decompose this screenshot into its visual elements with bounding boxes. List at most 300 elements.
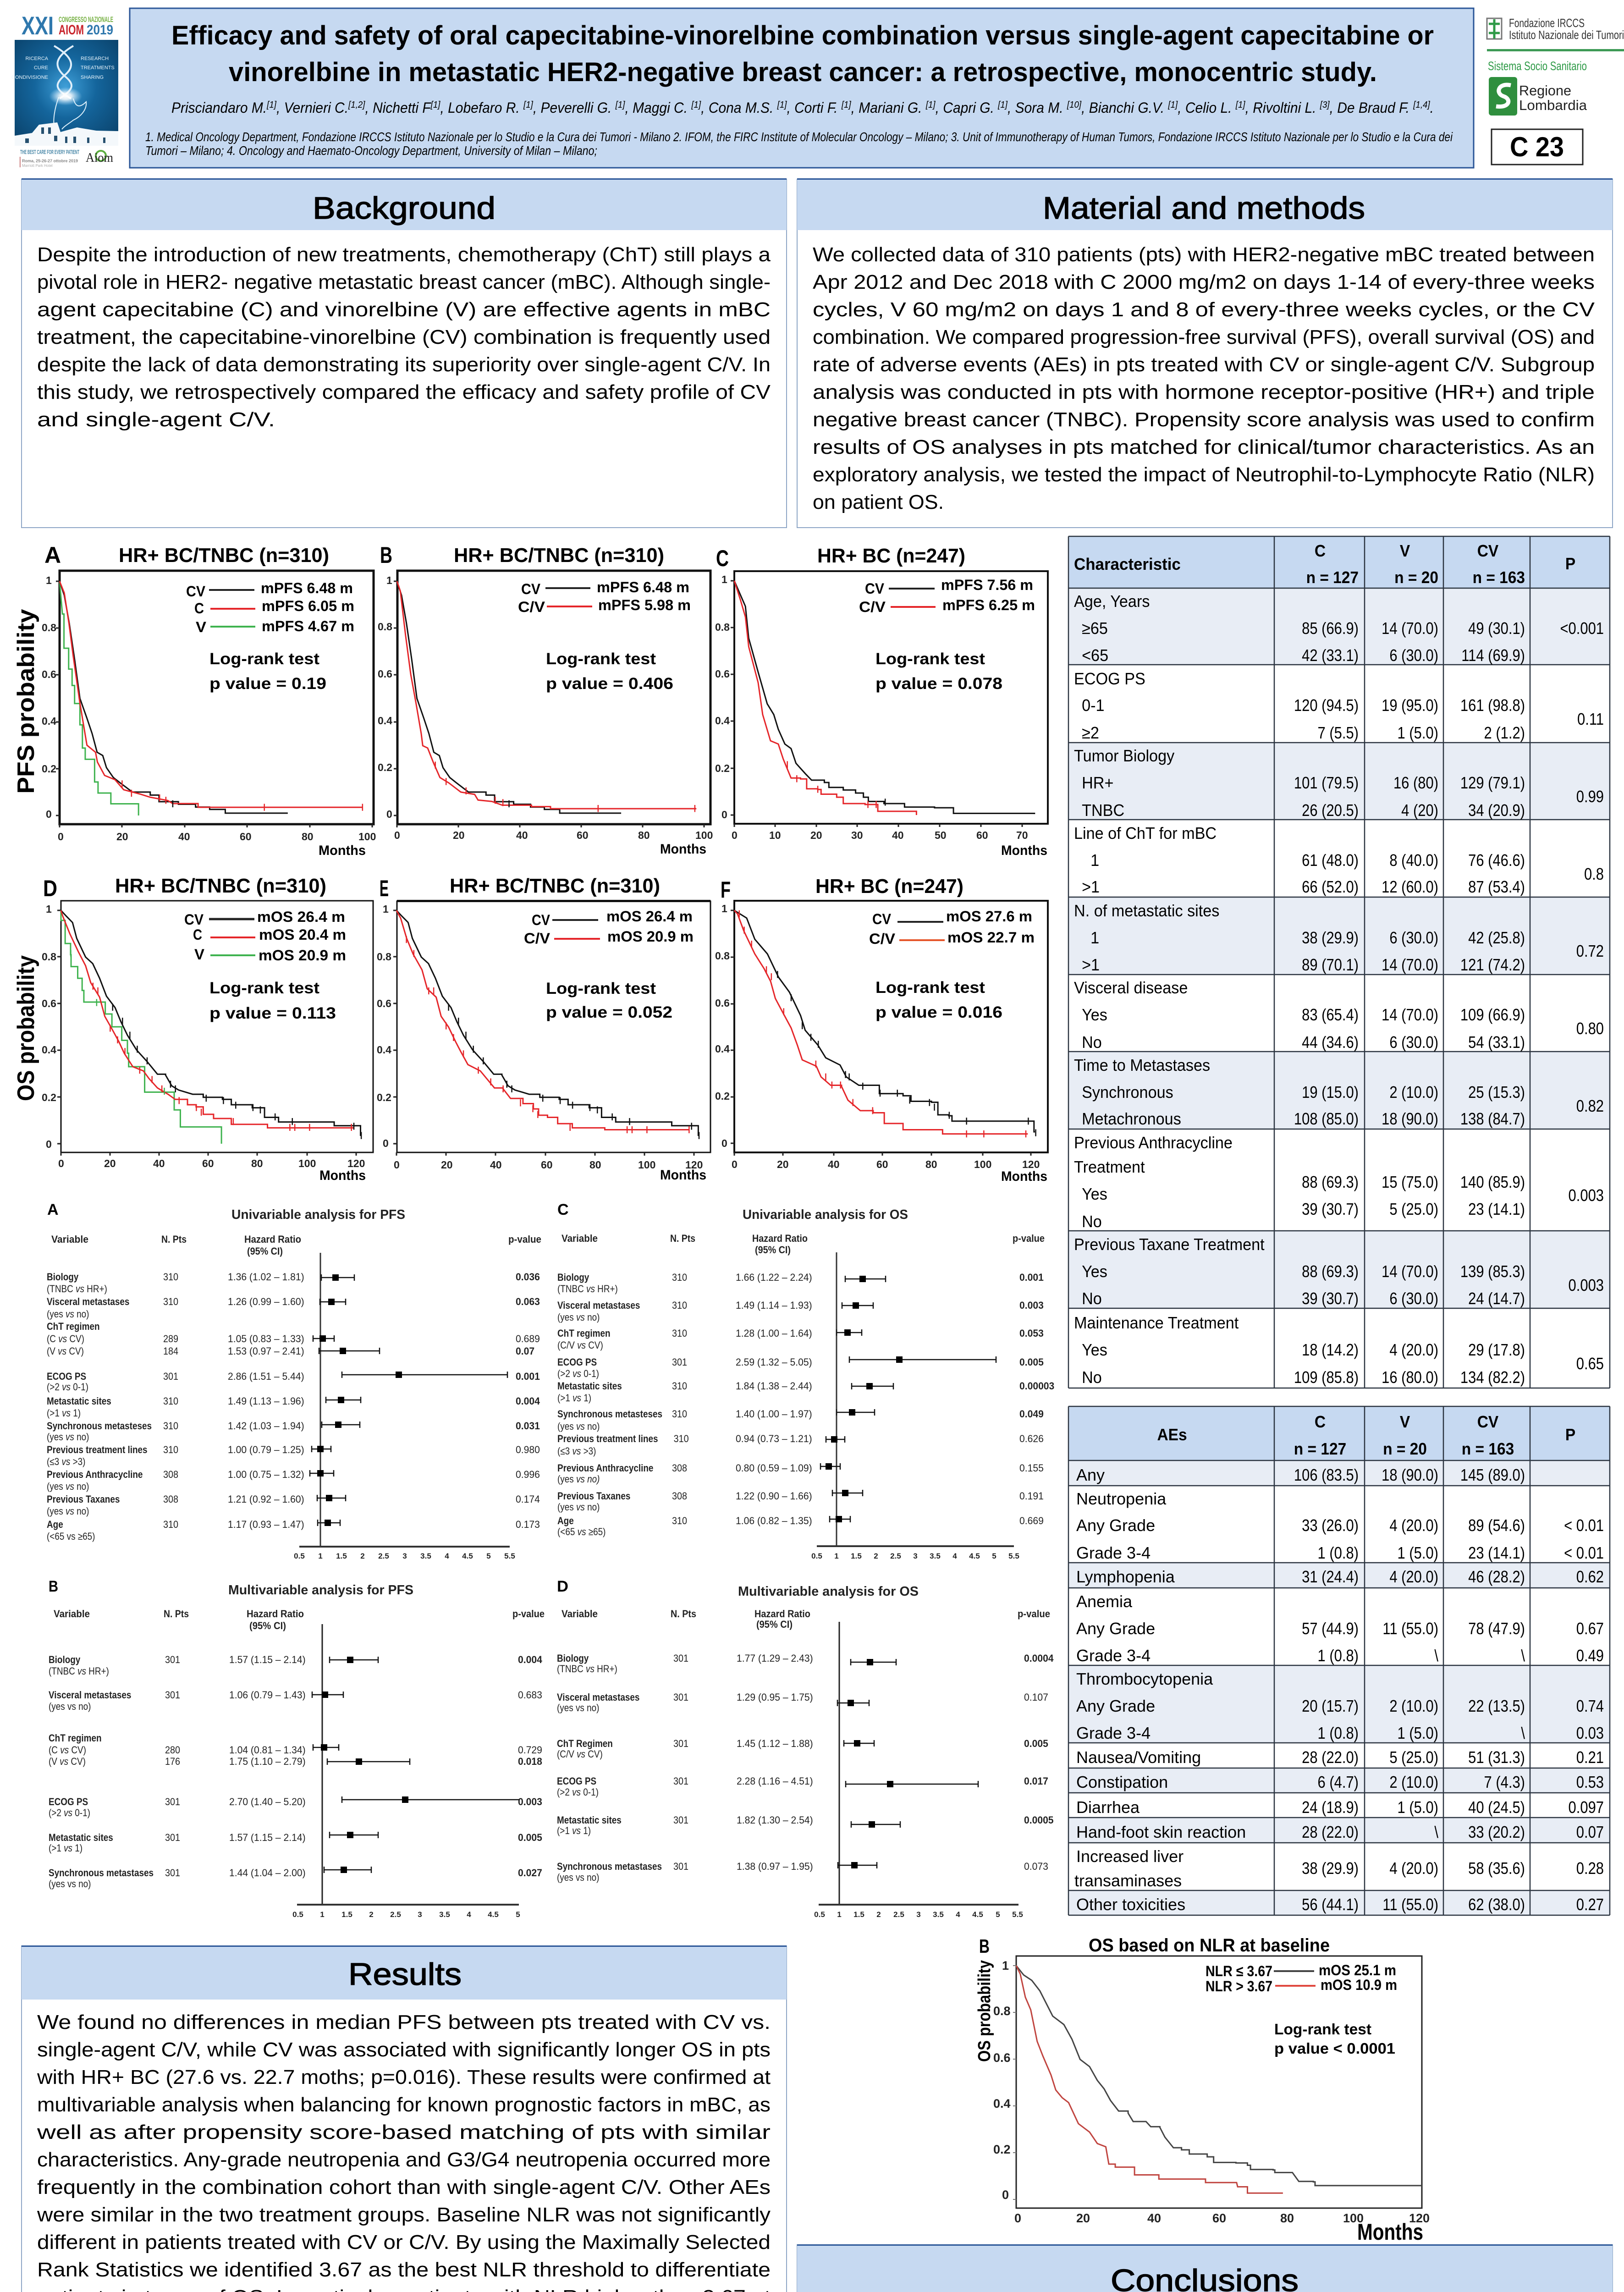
chart A: PFS HR+ BC/TNBC, CV vs C vs V: Months [319,843,366,858]
chart F: OS HR+ BC, CV vs C/V: 0.4 [715,1043,730,1055]
column CV values: 161 (98.8) [1460,697,1525,715]
authors: , Capri G. [936,99,998,116]
forest plot C: univariable analysis for OS: 1.49 (1.14 – 1.93) [736,1300,812,1311]
forest plot C: univariable analysis for OS: Visceral metastases [557,1300,640,1311]
forest plot A: univariable analysis for PFS: Univariable analysis for PFS [231,1207,405,1222]
panel: material and methods [797,178,1613,528]
adverse event labels: Hand-foot skin reaction [1076,1823,1246,1841]
forest plot D: multivariable analysis for OS: 5.5 [1012,1910,1023,1919]
forest plot A: univariable analysis for PFS: 3.5 [420,1552,431,1560]
legend C: mPFS 7.56 m [941,577,1033,593]
table header row: P [1565,1426,1575,1444]
chart: OS based on NLR at baseline: Months [1357,2219,1423,2245]
column C values: 39 (30.7) [1302,1290,1359,1308]
chart C: PFS HR+ BC, CV vs C/V [715,545,1048,858]
column CV values: 121 (74.2) [1460,956,1525,975]
chart A: PFS HR+ BC/TNBC, CV vs C vs V: A [44,542,61,568]
forest plot C: univariable analysis for OS: 2.59 (1.32 – 5.05) [736,1356,812,1368]
forest plot A: univariable analysis for PFS: 1.36 (1.02 – 1.81) [228,1271,304,1283]
forest plot C: univariable analysis for OS: Previous Anthracycline [557,1463,653,1474]
column P values [1560,620,1604,1373]
chart F: OS HR+ BC, CV vs C/V: 20 [777,1158,789,1170]
legend A: C [194,600,204,617]
column CV values: 89 (54.6) [1468,1517,1525,1535]
chart F: OS HR+ BC, CV vs C/V: 0 [732,1158,738,1170]
column C values: 39 (30.7) [1302,1201,1359,1219]
forest plot C: univariable analysis for OS: (C/V vs CV) [557,1340,603,1351]
forest plot A: univariable analysis for PFS: 1.21 (0.92 – 1.60) [228,1493,304,1505]
forest plot A: univariable analysis for PFS: 0.07 [516,1345,534,1357]
forest plot B: multivariable analysis for PFS: Metastatic sites [49,1832,113,1843]
text block: background: agent capecitabine (C) and vinorelbine (V) are effective agents in mBC [37,298,771,321]
forest plot C: univariable analysis for OS: (yes vs no) [557,1474,600,1485]
forest plot A: univariable analysis for PFS: 0.174 [516,1493,540,1505]
forest plot D: multivariable analysis for OS: (>2 vs 0-1) [557,1787,599,1798]
text block: results: were similar in the two treatment groups. Baseline NLR was not significantly [37,2204,771,2226]
column CV values: 7 (4.3) [1484,1774,1525,1792]
log-rank F [875,979,1002,1021]
column P values: 0.49 [1576,1647,1604,1665]
column C values: 7 (5.5) [1318,724,1359,743]
characteristic labels: Maintenance Treatment [1074,1314,1239,1332]
forest plot D: multivariable analysis for OS: (TNBC vs HR+) [557,1664,617,1675]
chart D: OS HR+ BC/TNBC, CV vs C vs V: 1 [46,903,52,915]
column P values: 0.72 [1576,942,1604,961]
chart: OS based on NLR at baseline: 0.8 [993,2004,1011,2018]
logo: Regione Lombardia [1489,77,1587,116]
column C values: 89 (70.1) [1302,956,1359,975]
characteristic labels [1074,592,1265,1387]
heading: material and methods [797,178,1613,230]
forest plot D: multivariable analysis for OS: (yes vs no) [557,1702,599,1713]
chart D: OS HR+ BC/TNBC, CV vs C vs V: 40 [153,1157,165,1169]
logo: Regione Lombardia: Regione [1519,83,1571,99]
log-rank C: p value = 0.078 [875,675,1002,693]
chart F: OS HR+ BC, CV vs C/V: 0.8 [715,950,730,962]
table header row: n = 127 [1294,1440,1346,1458]
forest plot D: multivariable analysis for OS: 0.073 [1024,1861,1048,1872]
legend D: C [193,926,202,943]
column V values: 4 (20.0) [1389,1341,1438,1360]
text block: background: and single-agent C/V. [37,408,275,431]
forest plot D: multivariable analysis for OS: 1.29 (0.95 – 1.75) [737,1691,813,1703]
forest plot C: univariable analysis for OS: 0.049 [1019,1408,1044,1420]
column P values: 0.74 [1576,1697,1604,1716]
text block: results: characteristics. Any-grade neutropenia and G3/G4 neutropenia occurred more [37,2149,771,2171]
chart: OS based on NLR at baseline: 1 [1002,1959,1009,1972]
forest plot C: univariable analysis for OS: 310 [672,1515,687,1526]
legend E: C/V [524,930,551,947]
text block: background: Despite the introduction of new treatments, chemotherapy (ChT) still plays a [37,243,771,266]
forest plot B: multivariable analysis for PFS: p-value [512,1608,545,1620]
log-rank NLR [1274,2021,1395,2057]
chart: OS based on NLR at baseline: 0 [1002,2188,1009,2202]
forest plot A: univariable analysis for PFS: 4 [445,1552,449,1560]
chart B: PFS HR+ BC/TNBC, CV vs C/V: 0 [386,808,392,820]
column V values: 14 (70.0) [1382,1263,1438,1281]
log-rank B: p value = 0.406 [546,675,673,693]
forest plot D: multivariable analysis for OS: 301 [673,1653,688,1664]
adverse event labels: transaminases [1074,1871,1182,1890]
characteristic labels: Line of ChT for mBC [1074,824,1217,843]
forest plot A: univariable analysis for PFS: (TNBC vs HR+) [47,1284,107,1295]
authors: , Nichetti F [365,99,432,116]
forest plot A: univariable analysis for PFS: 1.26 (0.99 – 1.60) [228,1296,304,1307]
chart C: PFS HR+ BC, CV vs C/V: 0.6 [715,668,730,680]
forest plot D: multivariable analysis for OS: 0.017 [1024,1775,1048,1787]
panel: results [22,1945,787,2292]
legend NLR: mOS 10.9 m [1321,1977,1397,1993]
forest plot D: multivariable analysis for OS: 0.5 [814,1910,825,1919]
forest plot A: univariable analysis for PFS: (C vs CV) [47,1333,84,1344]
poster artwork: CURE [34,65,48,71]
heading: material and methods: Material and methods [1043,191,1365,226]
adverse event labels [1074,1466,1246,1914]
legend C: C/V [859,599,886,615]
chart B: PFS HR+ BC/TNBC, CV vs C/V: 0.4 [378,715,392,727]
forest plot A: univariable analysis for PFS: 0.996 [516,1469,540,1480]
characteristic labels: >1 [1082,956,1100,974]
legend A: mPFS 6.48 m [261,580,353,596]
characteristic labels: 0-1 [1082,696,1105,715]
characteristic labels: Yes [1082,1185,1107,1203]
chart D: OS HR+ BC/TNBC, CV vs C vs V [42,875,373,1183]
forest plot A: univariable analysis for PFS: 0.5 [294,1552,305,1560]
forest plot B: multivariable analysis for PFS: 1.75 (1.10 – 2.79) [229,1756,306,1767]
legend D: mOS 20.4 m [259,926,346,943]
authors: , Corti F. [787,99,842,116]
column CV values: 40 (24.5) [1468,1799,1525,1817]
heading: results: Results [348,1957,462,1992]
column P values: 0.097 [1569,1799,1604,1817]
column V values: 2 (10.0) [1389,1084,1438,1102]
column P values: 0.82 [1576,1097,1604,1116]
table header row: n = 20 [1394,569,1438,587]
chart C: PFS HR+ BC, CV vs C/V: C [716,545,729,571]
column V values: 14 (70.0) [1382,956,1438,975]
chart: OS based on NLR at baseline: OS probability [975,1960,994,2062]
forest plot B: multivariable analysis for PFS: 4 [467,1910,471,1919]
table header row: V [1400,542,1410,560]
forest plot C: univariable analysis for OS: 3.5 [930,1552,941,1560]
forest plot B: multivariable analysis for PFS: 3.5 [439,1910,450,1919]
forest plot D: multivariable analysis for OS: (yes vs no) [557,1872,599,1883]
forest plot C: univariable analysis for OS: 0.626 [1019,1433,1044,1444]
authors: [1] [997,100,1007,110]
chart A: PFS HR+ BC/TNBC, CV vs C vs V: 0.6 [42,668,56,680]
forest plot C: univariable analysis for OS: 0.155 [1019,1462,1044,1474]
column C values: 85 (66.9) [1302,620,1359,638]
affiliations: Tumori – Milano; 4. Oncology and Haemato-Oncology Department, University of Milan – Milano; [145,143,597,158]
chart B: PFS HR+ BC/TNBC, CV vs C/V: B [380,542,392,568]
chart E: OS HR+ BC/TNBC, CV vs C/V [377,875,710,1183]
column CV values: 54 (33.1) [1468,1034,1525,1052]
column V values: 2 (10.0) [1389,1697,1438,1716]
forest plot B: multivariable analysis for PFS: Hazard Ratio [247,1608,304,1620]
column C values: 109 (85.8) [1294,1369,1359,1387]
forest plot A: univariable analysis for PFS: 1.49 (1.13 – 1.96) [228,1395,304,1407]
table header row: n = 163 [1473,569,1525,587]
forest plot C: univariable analysis for OS: Hazard Ratio [752,1233,808,1244]
legend D: V [194,946,205,963]
forest plot C: univariable analysis for OS: 1 [834,1552,839,1560]
chart E: OS HR+ BC/TNBC, CV vs C/V: 20 [441,1159,453,1171]
forest plot B: multivariable analysis for PFS: 301 [165,1796,180,1807]
column C values: 38 (29.9) [1302,929,1359,948]
forest plot C: univariable analysis for OS: 0.005 [1019,1356,1044,1368]
column V values: 15 (75.0) [1382,1174,1438,1192]
column C values: 56 (44.1) [1302,1896,1359,1914]
text block: background: pivotal role in HER2- negative metastatic breast cancer (mBC). Although single- [37,271,771,293]
column C values: 120 (94.5) [1294,697,1359,715]
forest plot D: multivariable analysis for OS: 301 [673,1861,688,1872]
chart F: OS HR+ BC, CV vs C/V: 80 [925,1158,937,1170]
chart C: PFS HR+ BC, CV vs C/V: 20 [810,829,822,841]
table header row: Characteristic [1074,555,1181,573]
forest plot A: univariable analysis for PFS: 1.00 (0.75 – 1.32) [228,1469,304,1480]
forest plot B: multivariable analysis for PFS: N. Pts [164,1608,189,1620]
column C values: 1 (0.8) [1318,1725,1359,1743]
column C values: 19 (15.0) [1302,1084,1359,1102]
forest plot C: univariable analysis for OS: 0.053 [1019,1328,1044,1339]
column CV values: 29 (17.8) [1468,1341,1525,1360]
column V values: 1 (5.0) [1398,1725,1438,1743]
chart: OS based on NLR at baseline [975,1935,1430,2245]
authors: [10] [1067,100,1082,110]
column CV values: 23 (14.1) [1468,1544,1525,1563]
forest plot D: multivariable analysis for OS: Variable [562,1608,598,1620]
poster footer: THE BEST CARE FOR EVERY PATIENT [20,149,79,155]
legend B: CV [521,581,541,597]
characteristic labels: Yes [1082,1341,1107,1359]
log-rank E [546,980,672,1021]
authors: [1] [925,100,936,110]
column V values: 16 (80.0) [1382,1369,1438,1387]
authors: [1] [691,100,701,110]
table header row: n = 127 [1306,569,1359,587]
column CV values: 114 (69.9) [1461,647,1525,665]
forest plot A: univariable analysis for PFS: 0.004 [516,1395,540,1407]
forest plot A: univariable analysis for PFS: p-value [508,1234,541,1245]
forest plot D: multivariable analysis for OS: 1.45 (1.12 – 1.88) [737,1738,813,1749]
legend B: mPFS 6.48 m [597,579,689,595]
column V values: 1 (5.0) [1398,1544,1438,1563]
forest plot C: univariable analysis for OS: 0.00003 [1019,1380,1054,1392]
column C values: 26 (20.5) [1302,802,1359,820]
chart B: PFS HR+ BC/TNBC, CV vs C/V: 100 [695,829,713,841]
forest plot B: multivariable analysis for PFS: ECOG PS [49,1796,88,1807]
chart F: OS HR+ BC, CV vs C/V: 0 [721,1137,727,1149]
forest plot A: univariable analysis for PFS: 0.173 [516,1519,540,1530]
column CV values: 33 (20.2) [1468,1824,1525,1842]
forest plot C: univariable analysis for OS: ECOG PS [557,1357,597,1368]
chart C: PFS HR+ BC, CV vs C/V: 0.2 [715,762,730,774]
log-rank B: Log-rank test [546,650,656,668]
adverse event labels: Nausea/Vomiting [1076,1748,1201,1767]
column V values: 1 (5.0) [1398,1799,1438,1817]
table header row: CV [1477,1413,1498,1431]
forest plot B: multivariable analysis for PFS: Multivariable analysis for PFS [228,1583,413,1598]
characteristic labels: Time to Metastases [1074,1056,1210,1074]
column CV values: 76 (46.6) [1468,852,1525,870]
chart D: OS HR+ BC/TNBC, CV vs C vs V: 100 [298,1157,316,1169]
poster code box: C 23: C 23 [1510,132,1564,162]
text block: background: this study, we retrospectively compared the efficacy and safety profile of CV [37,381,771,403]
column CV values: \ [1521,1725,1525,1743]
forest plot C: univariable analysis for OS: 1.40 (1.00 – 1.97) [736,1408,812,1420]
legend A: V [196,619,207,635]
forest plot C: univariable analysis for OS: 308 [672,1463,687,1474]
authors: [1,2] [348,100,365,110]
forest plot D: multivariable analysis for OS: 0.107 [1024,1691,1048,1703]
column C values: 88 (69.3) [1302,1174,1359,1192]
adverse event labels: Grade 3-4 [1076,1724,1151,1742]
column CV values: 129 (79.1) [1460,774,1525,793]
chart E: OS HR+ BC/TNBC, CV vs C/V: 40 [490,1159,502,1171]
characteristic labels: ≥2 [1082,724,1099,742]
chart D: OS HR+ BC/TNBC, CV vs C vs V: 120 [347,1157,365,1169]
column CV values: 24 (14.7) [1468,1290,1525,1308]
chart: OS based on NLR at baseline: 20 [1076,2211,1090,2225]
forest plot D: multivariable analysis for OS: 0.0004 [1024,1653,1054,1664]
log-rank NLR: Log-rank test [1274,2021,1371,2038]
forest plot D: multivariable analysis for OS: 301 [673,1692,688,1703]
forest plot C: univariable analysis for OS: 310 [672,1381,687,1392]
forest plot D: multivariable analysis for OS: (95% CI) [756,1619,793,1630]
column CV values: 51 (31.3) [1468,1749,1525,1767]
forest plot D: multivariable analysis for OS: 3 [916,1910,921,1919]
characteristic labels: Tumor Biology [1074,747,1175,765]
forest plot D: multivariable analysis for OS: Synchronous metastases [557,1861,662,1872]
forest plot A: univariable analysis for PFS: (V vs CV) [47,1346,84,1357]
text block: results: frequently in the combination cohort than with single-agent C/V. Other AEs [37,2176,771,2198]
forest plot C: univariable analysis for OS: p-value [1013,1233,1045,1244]
column C values: 6 (4.7) [1318,1774,1359,1792]
forest plot B: multivariable analysis for PFS: 5 [516,1910,520,1919]
chart C: PFS HR+ BC, CV vs C/V: 60 [976,829,988,841]
log-rank D [209,979,336,1022]
forest plot D: multivariable analysis for OS: (>1 vs 1) [557,1825,591,1836]
text block: results: Rank Statistics we identified 3.67 as the best NLR threshold to differentiate [37,2259,771,2281]
forest plot C: univariable analysis for OS: 308 [672,1491,687,1502]
chart D: OS HR+ BC/TNBC, CV vs C vs V: 0.4 [42,1044,56,1056]
column C values: 57 (44.9) [1302,1620,1359,1638]
characteristic labels: Yes [1082,1262,1107,1281]
forest plot A: univariable analysis for PFS: 0.063 [516,1296,540,1307]
authors: [1] [523,100,533,110]
logo: Fondazione IRCCS: Fondazione IRCCS [1509,16,1585,30]
chart: OS based on NLR at baseline: 100 [1343,2211,1364,2225]
column V values: 6 (30.0) [1389,647,1438,665]
authors: , Rivoltini L. [1245,99,1320,116]
forest plot C: univariable analysis for OS: 0.001 [1019,1272,1044,1283]
table header row: C [1315,1413,1326,1431]
forest plot A: univariable analysis for PFS: 1.00 (0.79 – 1.25) [228,1444,304,1455]
column C values: 42 (33.1) [1302,647,1359,665]
legend E: CV [532,912,551,928]
log-rank D: p value = 0.113 [209,1004,336,1022]
column V values: 5 (25.0) [1389,1201,1438,1219]
forest plot A: univariable analysis for PFS: 5 [486,1552,491,1560]
chart A: PFS HR+ BC/TNBC, CV vs C vs V: 0.8 [42,622,56,634]
forest plot B: multivariable analysis for PFS: Variable [54,1608,90,1620]
table header row [1074,542,1575,587]
forest plot B: multivariable analysis for PFS: 3 [418,1910,422,1919]
poster code box: C 23 [1492,129,1583,165]
adverse event labels: Increased liver [1076,1847,1184,1866]
forest plot D: multivariable analysis for OS: (C/V vs CV) [557,1749,603,1760]
forest plot B: multivariable analysis for PFS: 2.70 (1.40 – 5.20) [229,1796,306,1807]
forest plot A: univariable analysis for PFS: Biology [47,1272,79,1283]
authors: , Maggi C. [625,99,691,116]
title: vinorelbine in metastatic HER2-negative breast cancer: a retrospective, monocentric study. [229,57,1377,87]
column CV values: 42 (25.8) [1468,929,1525,948]
column P values: 0.21 [1576,1749,1604,1767]
forest plot A: univariable analysis for PFS: Previous Taxanes [47,1494,120,1505]
forest plot A: univariable analysis for PFS: (≤3 vs >3) [47,1456,85,1467]
chart F: OS HR+ BC, CV vs C/V: 100 [974,1158,991,1170]
forest plot A: univariable analysis for PFS: (yes vs no) [47,1481,89,1492]
forest plot D: multivariable analysis for OS: 2.5 [893,1910,904,1919]
adverse event labels: Neutropenia [1076,1489,1167,1508]
table header row: CV [1477,542,1498,560]
forest plot C: univariable analysis for OS: (yes vs no) [557,1502,600,1513]
forest plot B: multivariable analysis for PFS: (yes vs no) [49,1879,91,1890]
forest plot B: multivariable analysis for PFS: 301 [165,1654,180,1665]
forest plot D: multivariable analysis for OS: 1.5 [853,1910,864,1919]
characteristic labels: No [1082,1212,1102,1231]
heading: background [22,178,787,230]
column CV values: 22 (13.5) [1468,1697,1525,1716]
column C values: 44 (34.6) [1302,1034,1359,1052]
chart C: PFS HR+ BC, CV vs C/V: Months [1001,843,1047,858]
text block: methods: Apr 2012 and Dec 2018 with C 2000 mg/m2 on days 1-14 of every-three weeks [813,271,1595,293]
poster artwork: RESEARCH [81,56,109,61]
panel: conclusions [797,2244,1613,2292]
chart C: PFS HR+ BC, CV vs C/V: 30 [851,829,863,841]
table header row: n = 20 [1383,1440,1427,1458]
column C values: 33 (26.0) [1302,1517,1359,1535]
authors: [1] [777,100,787,110]
adverse event labels: Other toxicities [1076,1895,1185,1914]
chart B: PFS HR+ BC/TNBC, CV vs C/V [378,542,713,857]
chart C: PFS HR+ BC, CV vs C/V: 0 [732,829,738,841]
forest plot B: multivariable analysis for PFS: 1.44 (1.04 – 2.00) [229,1867,306,1879]
column C values: 24 (18.9) [1302,1799,1359,1817]
adverse event labels: Any [1076,1466,1105,1484]
column C values: 31 (24.4) [1302,1568,1359,1587]
log-rank C [875,650,1002,693]
table header row: AEs [1157,1426,1187,1444]
forest plot C: univariable analysis for OS: Synchronous metasteses [557,1409,662,1420]
forest plot A: univariable analysis for PFS: N. Pts [161,1234,187,1245]
column C values: 88 (69.3) [1302,1263,1359,1281]
forest plot C: univariable analysis for OS: C [557,1201,569,1218]
forest plot D: multivariable analysis for OS: 3.5 [933,1910,944,1919]
column CV values: 138 (84.7) [1460,1110,1525,1129]
forest plot D: multivariable analysis for OS: 2.28 (1.16 – 4.51) [737,1775,813,1787]
log-rank F: Log-rank test [875,979,985,997]
forest plot C: univariable analysis for OS: 310 [674,1433,689,1444]
column V values: 2 (10.0) [1389,1774,1438,1792]
adverse event labels: Diarrhea [1076,1798,1140,1817]
forest plot C: univariable analysis for OS: 0.669 [1019,1515,1044,1526]
forest plot B: multivariable analysis for PFS: (95% CI) [249,1620,286,1631]
adverse event labels: Any Grade [1076,1697,1155,1715]
chart E: OS HR+ BC/TNBC, CV vs C/V: 60 [541,1159,553,1171]
chart E: OS HR+ BC/TNBC, CV vs C/V: Months [660,1168,706,1183]
chart E: OS HR+ BC/TNBC, CV vs C/V: 0.8 [377,951,391,963]
